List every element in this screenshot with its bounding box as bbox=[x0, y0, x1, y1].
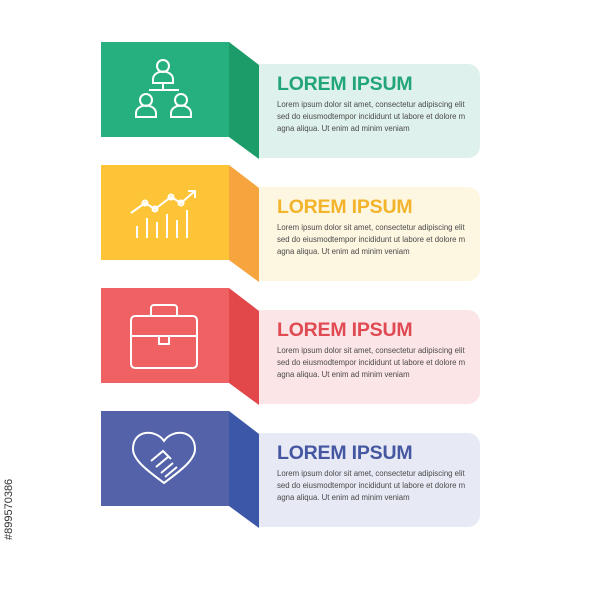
green card: sed do eiusmodtempor incididunt ut labore et dolore m bbox=[277, 112, 465, 121]
red card: LOREM IPSUM bbox=[277, 319, 412, 341]
row 4: blue bbox=[101, 411, 480, 528]
blue icon square bbox=[101, 411, 229, 506]
red fold bbox=[229, 288, 259, 405]
yellow card bbox=[259, 187, 480, 281]
green card bbox=[259, 64, 480, 158]
blue card: sed do eiusmodtempor incididunt ut labore et dolore m bbox=[277, 481, 465, 490]
red card: sed do eiusmodtempor incididunt ut labore et dolore m bbox=[277, 358, 465, 367]
green fold bbox=[229, 42, 259, 159]
yellow icon square bbox=[101, 165, 229, 260]
row 2: yellow bbox=[101, 165, 480, 282]
blue fold bbox=[229, 411, 259, 528]
blue card: agna aliqua. Ut enim ad minim veniam bbox=[277, 493, 410, 502]
red icon square bbox=[101, 288, 229, 383]
red card: agna aliqua. Ut enim ad minim veniam bbox=[277, 370, 410, 379]
yellow card: sed do eiusmodtempor incididunt ut labore et dolore m bbox=[277, 235, 465, 244]
row 1: green bbox=[101, 42, 480, 159]
row 3: red bbox=[101, 288, 480, 405]
green card: agna aliqua. Ut enim ad minim veniam bbox=[277, 124, 410, 133]
green card: LOREM IPSUM bbox=[277, 73, 412, 95]
blue card: LOREM IPSUM bbox=[277, 442, 412, 464]
red card: Lorem ipsum dolor sit amet, consectetur adipiscing elit bbox=[277, 346, 465, 355]
green icon square bbox=[101, 42, 229, 137]
blue card: Lorem ipsum dolor sit amet, consectetur adipiscing elit bbox=[277, 469, 465, 478]
yellow card: Lorem ipsum dolor sit amet, consectetur adipiscing elit bbox=[277, 223, 465, 232]
red card bbox=[259, 310, 480, 404]
side id text: #899570386 bbox=[3, 479, 15, 540]
yellow fold bbox=[229, 165, 259, 282]
blue card bbox=[259, 433, 480, 527]
yellow card: LOREM IPSUM bbox=[277, 196, 412, 218]
green card: Lorem ipsum dolor sit amet, consectetur adipiscing elit bbox=[277, 100, 465, 109]
yellow card: agna aliqua. Ut enim ad minim veniam bbox=[277, 247, 410, 256]
